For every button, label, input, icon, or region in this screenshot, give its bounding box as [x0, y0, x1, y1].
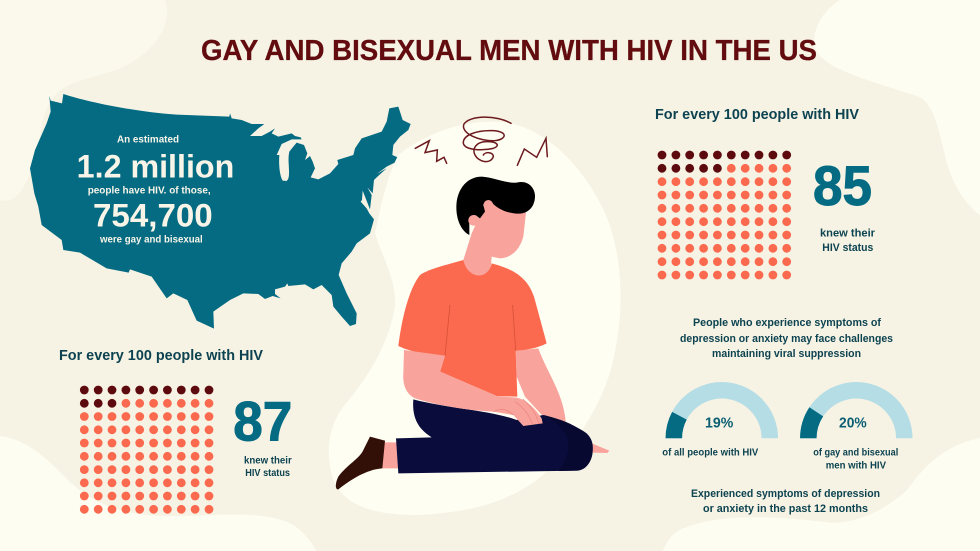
panel: 85 of 100 right — [655, 107, 876, 279]
map of the United States — [30, 94, 411, 329]
panel: person illustration — [329, 117, 621, 515]
label: an estimated: An estimated — [117, 134, 179, 146]
text: depression and viral suppression — [680, 317, 893, 360]
label: knew their HIV status: HIV status — [822, 242, 873, 254]
background blob — [329, 122, 621, 515]
label: knew their HIV status — [244, 454, 292, 479]
panel: 87 of 100 left — [59, 348, 292, 514]
label: knew their HIV status — [820, 228, 876, 254]
gauge: 20 percent: 20% — [839, 414, 867, 431]
heading: For every 100 people with HIV — [655, 107, 859, 123]
panel: US map with estimates — [30, 94, 411, 329]
text: experienced symptoms — [691, 488, 880, 515]
stat: 85: 85 — [813, 154, 872, 217]
gauge: 19 percent: of all people with HIV — [662, 447, 758, 459]
gauge: 20 percent: of gay and bisexual — [813, 447, 898, 459]
stat: 754,700: 754,700 — [93, 198, 213, 234]
text: experienced symptoms: or anxiety in the past 12 months — [703, 503, 868, 515]
dot grid: 87 of 100 — [80, 386, 213, 514]
text: depression and viral suppression: depression or anxiety may face challenges — [680, 333, 893, 345]
figure: seated man — [336, 177, 609, 489]
label: people have HIV: people have HIV. of those, — [88, 184, 211, 196]
gauge: 19 percent — [662, 390, 770, 459]
text: depression and viral suppression: maintaining viral suppression — [712, 348, 861, 360]
label: knew their HIV status: HIV status — [245, 467, 290, 479]
gauge: 20 percent: men with HIV — [826, 459, 886, 471]
label: were gay and bisexual: were gay and bisexual — [99, 234, 203, 246]
text: depression and viral suppression: People who experience symptoms of — [693, 317, 881, 329]
stat: 87: 87 — [233, 390, 292, 453]
gauge: 19 percent: 19% — [705, 414, 733, 431]
heading: For every 100 people with HIV — [59, 348, 263, 364]
label: knew their HIV status: knew their — [244, 454, 292, 466]
stat: 1.2 million: 1.2 million — [77, 148, 234, 184]
dot grid: 85 of 100 — [658, 151, 791, 279]
gauge: 20 percent — [808, 390, 904, 471]
title: GAY AND BISEXUAL MEN WITH HIV IN THE US — [201, 35, 817, 67]
icon: stress squiggles — [415, 117, 547, 165]
label: knew their HIV status: knew their — [820, 228, 876, 240]
text: experienced symptoms: Experienced symptoms of depression — [691, 488, 880, 500]
